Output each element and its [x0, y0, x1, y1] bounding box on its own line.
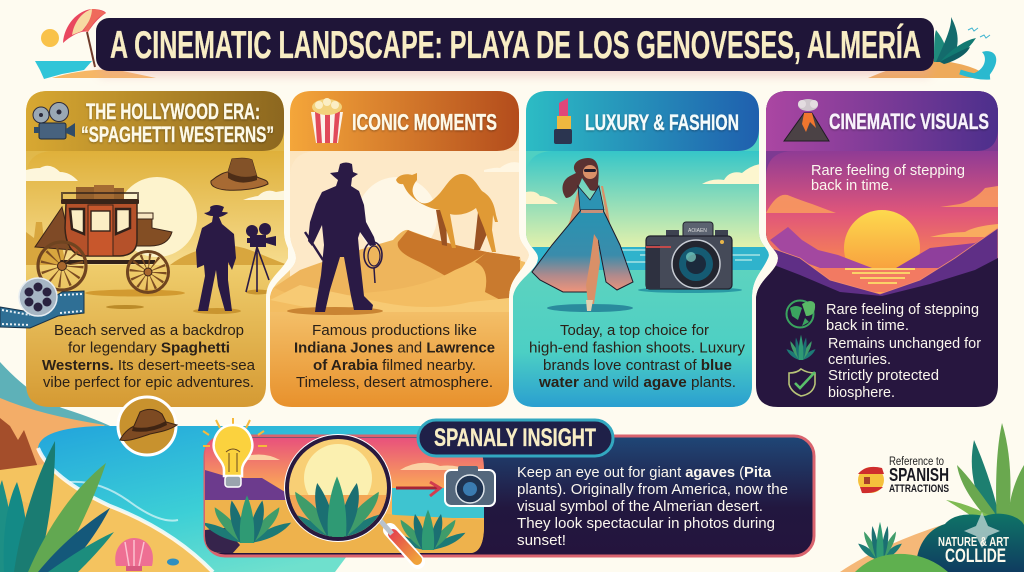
- title banner: [96, 18, 934, 76]
- header band: [526, 91, 759, 151]
- caption: back in time.: [811, 177, 893, 194]
- list item text 3: Strictly protected: [828, 367, 939, 384]
- insight pill: SPANALY INSIGHT: [434, 424, 596, 452]
- icon: agave: [786, 335, 816, 360]
- icon: Spanish flag circle: [858, 467, 884, 493]
- icon: lipstick: [554, 98, 572, 144]
- list item text 2: [828, 337, 981, 364]
- insight text: [517, 464, 788, 549]
- body text: of Arabia filmed nearby.: [313, 357, 476, 374]
- body text: Indiana Jones and Lawrence: [294, 340, 495, 356]
- icon: film camera: [33, 102, 75, 139]
- body text: Westerns. Its desert-meets-sea: [42, 357, 256, 374]
- panel: Spanaly insight: [203, 418, 814, 562]
- list item text 1: back in time.: [826, 317, 909, 334]
- insight text: sunset!: [517, 532, 566, 549]
- icon: volcano: [784, 99, 829, 141]
- logo: reference to Spanish attractions: [858, 456, 949, 495]
- body text: [42, 322, 256, 391]
- body text: vibe perfect for epic adventures.: [43, 374, 254, 391]
- body text: water and wild agave plants.: [538, 374, 736, 391]
- decoration: beach and umbrella top left: [35, 9, 156, 79]
- header band: [26, 91, 284, 151]
- body text: [529, 322, 746, 391]
- illustration: camera: [646, 222, 732, 289]
- body text: [294, 322, 495, 391]
- illustration: camera: AOIAEN: [688, 228, 707, 234]
- heading line 2: “SPAGHETTI WESTERNS”: [81, 122, 274, 147]
- illustration: cowboy hat: [211, 158, 268, 190]
- illustration: camel: [396, 173, 498, 252]
- insight pill: [418, 420, 613, 456]
- illustration: desert scene: [203, 438, 490, 554]
- caption: Rare feeling of stepping: [811, 162, 965, 179]
- icon: large wheel: [38, 242, 86, 290]
- icon: earth with leaf: [786, 300, 815, 328]
- panel: iconic moments: [270, 91, 530, 407]
- icon: large agave left: [0, 441, 114, 572]
- body text: brands love contrast of blue: [543, 357, 732, 374]
- icon: hat badge: [118, 397, 177, 455]
- illustration: magnifier with agave: [280, 434, 418, 562]
- caption: [812, 164, 964, 190]
- icon: light bulb: [203, 418, 267, 487]
- header band: [766, 91, 998, 151]
- illustration: western scene: [26, 151, 288, 314]
- illustration: stagecoach: [35, 185, 172, 292]
- illustration: sunset: [756, 151, 998, 300]
- illustration: woman in gown: [532, 158, 633, 311]
- illustration: movie camera on tripod: [246, 223, 276, 292]
- body text: Famous productions like: [312, 322, 477, 339]
- panel: the Hollywood era: [26, 91, 288, 407]
- logo: reference to Spanish attractions: Reference to: [889, 456, 944, 468]
- icon: pebble: [167, 558, 179, 566]
- insight text: Keep an eye out for giant agaves (Pita: [517, 464, 772, 481]
- header band: [290, 91, 519, 151]
- insight text: They look spectacular in photos during: [517, 515, 775, 532]
- body text: Beach served as a backdrop: [54, 322, 244, 339]
- panel: cinematic visuals: [756, 91, 1006, 407]
- icon: camera: [445, 466, 495, 506]
- list item text 3: [828, 367, 939, 401]
- logo: reference to Spanish attractions: ATTRACTIONS: [889, 483, 949, 495]
- icon: small wheel: [128, 252, 168, 292]
- icon: seashell: [115, 538, 153, 571]
- heading: LUXURY & FASHION: [585, 110, 739, 135]
- icon: shield with check: [789, 369, 815, 396]
- insight text: plants). Originally from America, now the: [517, 481, 788, 498]
- list item text 1: Rare feeling of stepping: [826, 301, 979, 318]
- icon: film reel and strip: [0, 278, 84, 328]
- list item text 1: [826, 303, 978, 330]
- illustration: desert: [270, 151, 530, 315]
- list item text 2: Remains unchanged for: [828, 335, 981, 352]
- heading: THE HOLLYWOOD ERA:: [86, 99, 260, 124]
- illustration: whip and rope: [305, 232, 382, 283]
- body text: Today, a top choice for: [560, 322, 709, 339]
- body text: Timeless, desert atmosphere.: [296, 374, 493, 391]
- insight text: visual symbol of the Almerian desert.: [517, 498, 763, 515]
- body text: for legendary Spaghetti: [68, 340, 230, 356]
- list item text 3: biosphere.: [828, 384, 895, 401]
- logo: reference to Spanish attractions: SPANISH: [889, 465, 949, 485]
- decoration: agave and wave top right: [868, 17, 996, 78]
- illustration: cowboy silhouette: [196, 205, 236, 311]
- panel: luxury and fashion: [513, 91, 773, 407]
- illustration: adventurer silhouette: [308, 162, 376, 312]
- body text: high-end fashion shoots. Luxury: [529, 340, 746, 356]
- illustration: coast: [513, 151, 773, 407]
- list item text 2: centuries.: [828, 351, 891, 368]
- heading: ICONIC MOMENTS: [352, 109, 497, 135]
- decoration: corner foliage: [840, 423, 1024, 572]
- icon: popcorn: [311, 98, 343, 143]
- decoration: beach scene bottom left: [0, 362, 430, 572]
- arrow: [396, 482, 440, 496]
